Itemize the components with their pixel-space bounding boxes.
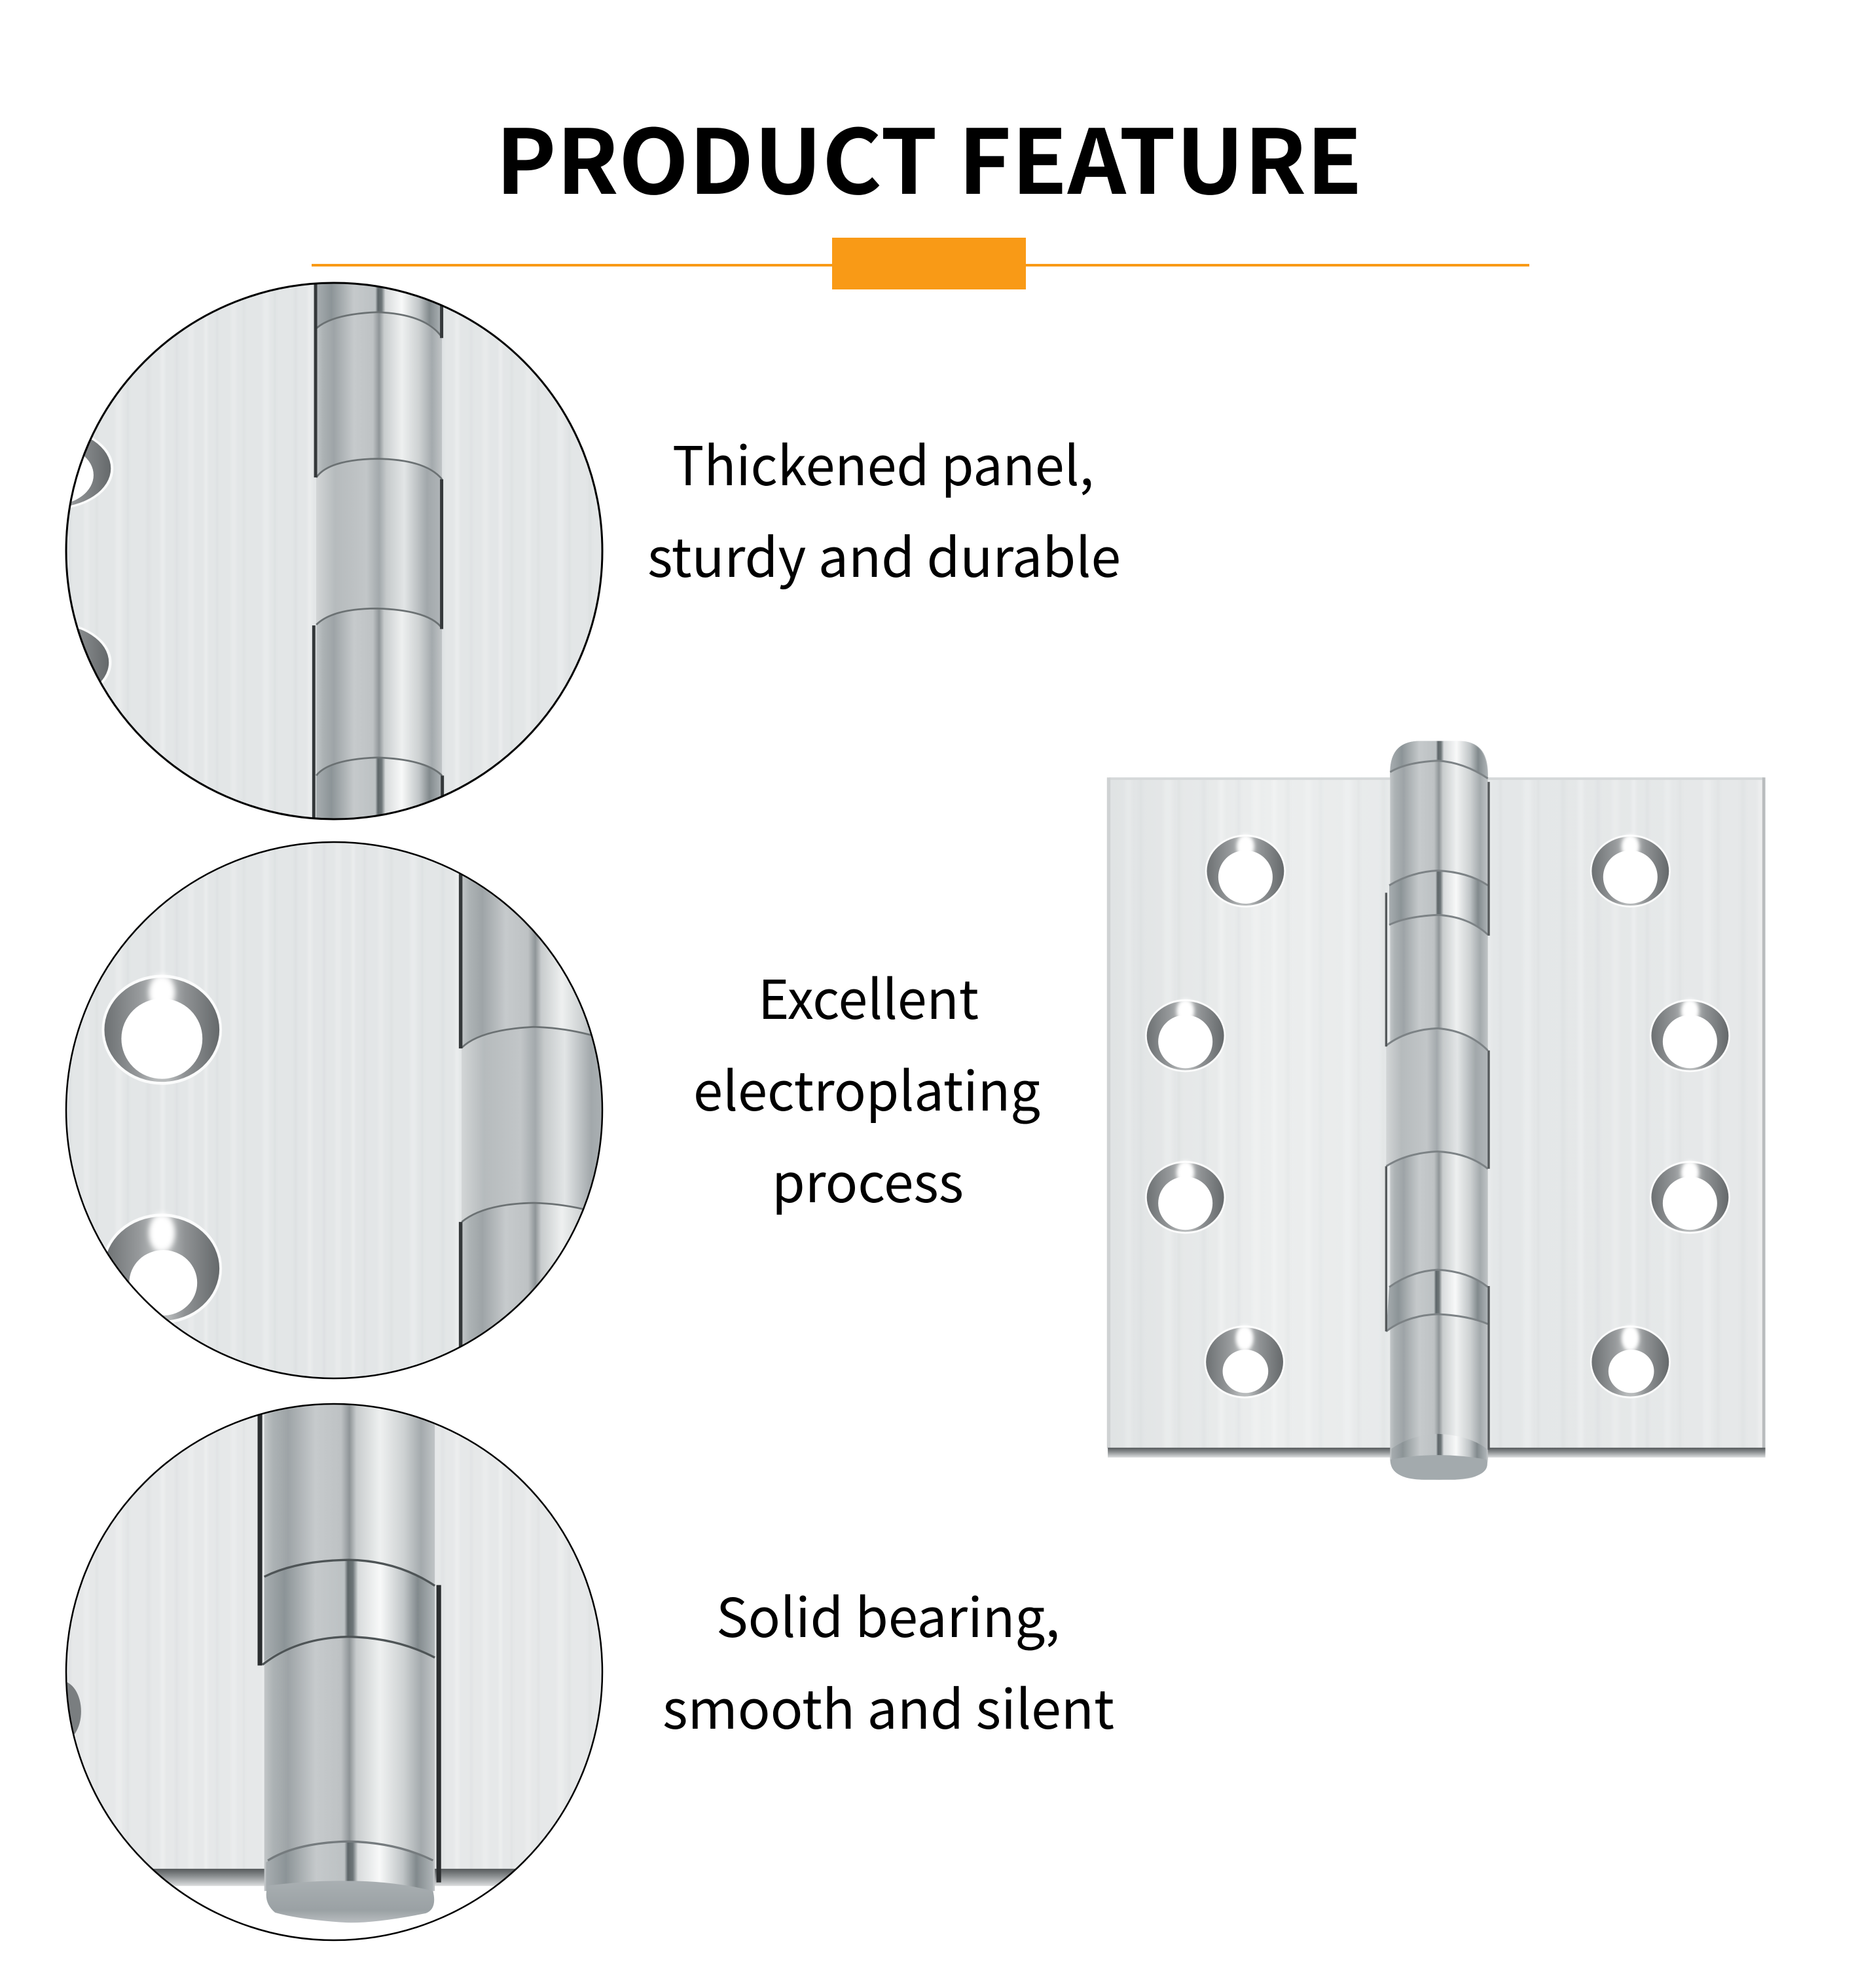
plate bottom edge [153, 1869, 515, 1886]
text block: solid bearing: Solid bearing, [716, 1575, 1060, 1653]
icon: screw holes [101, 975, 222, 1323]
text block: thickened panel: Thickened panel, [672, 423, 1094, 501]
text block: electroplating: electroplating [693, 1048, 1040, 1126]
hinge leaf plate [1107, 777, 1766, 1458]
title: PRODUCT FEATURE [496, 91, 1362, 220]
hinge barrel [1386, 741, 1489, 1480]
text block: solid bearing [663, 1575, 1114, 1744]
text block: electroplating: process [772, 1140, 964, 1218]
main hinge product image [1107, 741, 1766, 1480]
text block: thickened panel: sturdy and durable [647, 515, 1121, 593]
text block: electroplating [693, 957, 1040, 1218]
text block: electroplating: Excellent [758, 957, 979, 1035]
hinge barrel [458, 874, 602, 1347]
text block: solid bearing: smooth and silent [663, 1666, 1114, 1744]
text block: thickened panel [647, 423, 1121, 593]
heading divider: orange line with block [312, 238, 1529, 289]
panel: detail circle, thickened panel [65, 282, 604, 820]
icon: screw holes, partial [0, 427, 113, 703]
panel: detail circle, electroplating [52, 825, 615, 1388]
hinge barrel [260, 1388, 439, 1923]
icon: screw hole, partial [67, 1682, 81, 1735]
hinge barrel [314, 262, 443, 825]
panel: detail circle, solid bearing [42, 1388, 615, 1940]
screw holes [1145, 835, 1730, 1399]
